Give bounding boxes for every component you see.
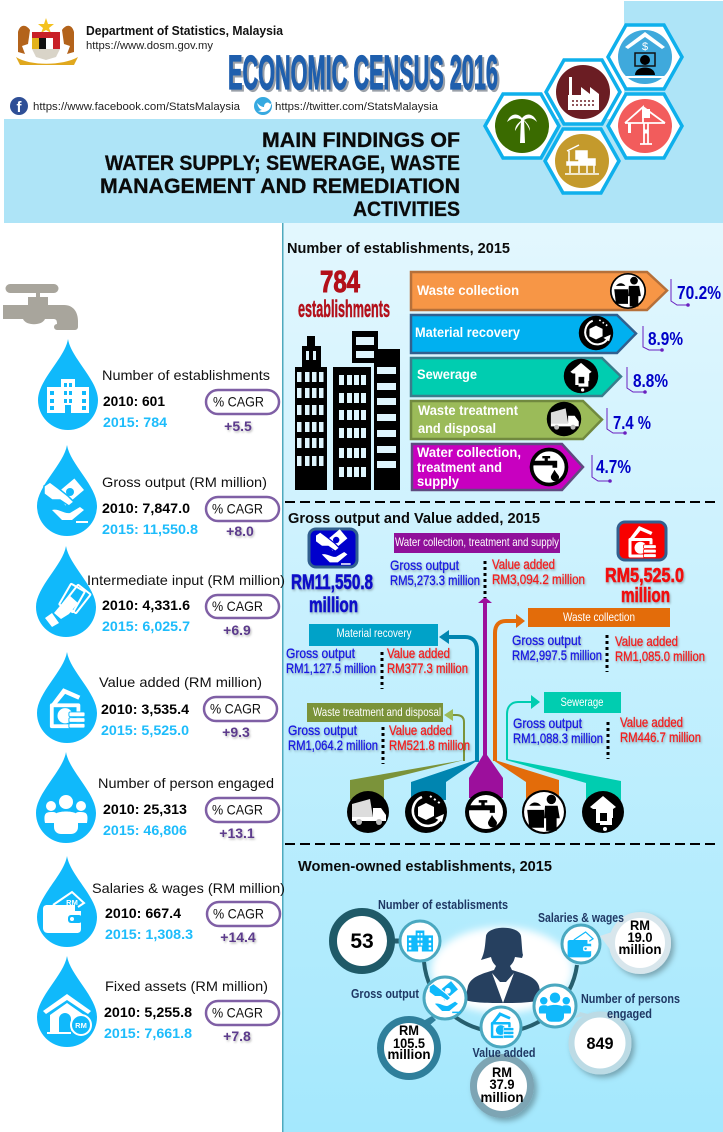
- heading: main findings title: ACTIVITIES: [353, 198, 460, 221]
- stat: gross output: 105.5: [393, 1035, 425, 1051]
- text: value added total: RM5,525.0: [605, 565, 684, 587]
- chart: share arrow waste treatment: 7.4 %: [613, 413, 651, 433]
- icon: drop people: [36, 752, 96, 843]
- chart: share arrow water collection: Water collection,: [417, 444, 521, 460]
- panel: indicator fixed assets: 2010: 5,255.8: [104, 1004, 192, 1020]
- panel: indicator value added: % CAGR: [210, 700, 261, 716]
- panel: waste treatment figures: Waste treatment and disposal: [313, 705, 441, 719]
- panel: indicator persons engaged: [36, 752, 279, 843]
- icon: hexagon services: [608, 25, 682, 89]
- panel: indicator persons engaged: 2010: 25,313: [103, 801, 187, 817]
- stat: persons engaged: [534, 985, 680, 1072]
- heading: gross output and value added: Gross output and Value added, 2015: [288, 511, 540, 527]
- panel: indicator salaries and wages: [37, 856, 285, 947]
- panel: women-owned diagram: [333, 897, 680, 1114]
- stat: value added: million: [480, 1089, 524, 1105]
- icon: city buildings: [295, 331, 400, 490]
- text: value added total: [605, 565, 684, 607]
- chart: share arrow sewerage: [411, 358, 668, 396]
- icon: businesswoman: [465, 928, 542, 1003]
- chart: share arrow sewerage: Sewerage: [417, 366, 477, 382]
- heading: economic census: [228, 47, 500, 102]
- text: gross output total: RM11,550.8: [291, 571, 373, 594]
- text: facebook url: https://www.facebook.com/StatsMalaysia: [33, 101, 241, 113]
- heading: women-owned establishments: Women-owned establishments, 2015: [298, 859, 552, 875]
- panel: indicator gross output: Gross output (RM million): [102, 474, 267, 490]
- stat: gross output: million: [388, 1046, 430, 1062]
- panel: water collection figures: [390, 533, 585, 598]
- icon: drop building: [38, 339, 98, 430]
- panel: waste treatment figures: RM1,064.2 million: [288, 737, 378, 753]
- panel: indicator persons engaged: 2015: 46,806: [103, 822, 187, 838]
- panel: indicator gross output: % CAGR: [212, 500, 263, 516]
- chart: share arrow water collection: [412, 444, 631, 490]
- panel: indicator intermediate input: [36, 546, 285, 638]
- text: gross output total: [291, 571, 373, 617]
- panel: water collection figures: RM3,094.2 million: [492, 571, 585, 587]
- panel: material recovery figures: RM377.3 million: [387, 660, 468, 676]
- stat: value added: 37.9: [490, 1076, 515, 1092]
- icon: water tap: [3, 284, 78, 330]
- heading: main findings title: MANAGEMENT AND REMEDIATION: [100, 175, 460, 198]
- panel: indicator fixed assets: % CAGR: [212, 1004, 263, 1020]
- arrow: to water collection: [469, 597, 503, 798]
- chart: share arrow waste treatment: [411, 401, 651, 439]
- panel: indicator value added: [37, 652, 277, 743]
- icon: coat of arms: [16, 18, 78, 65]
- panel: sewerage figures: RM1,088.3 million: [513, 730, 603, 746]
- white collar: [492, 973, 514, 1003]
- text: gross output total: million: [309, 594, 358, 617]
- chart: share arrow sewerage: 8.8%: [633, 371, 668, 391]
- stat: persons engaged: Number of persons: [581, 991, 680, 1006]
- icon: hexagon mining: [545, 129, 619, 193]
- icon: drop house: [37, 956, 97, 1047]
- stat: salaries and wages: Salaries & wages: [538, 910, 624, 925]
- panel: water collection figures: Gross output: [390, 557, 459, 573]
- panel: sewerage figures: RM446.7 million: [620, 729, 701, 745]
- panel: sewerage figures: Sewerage: [560, 695, 604, 709]
- icon: twitter: [254, 97, 272, 115]
- stat: salaries and wages: [538, 910, 668, 971]
- icon: drop house: RM: [75, 1021, 87, 1030]
- stat: value added: Value added: [472, 1045, 536, 1060]
- icon: drop money stack: [37, 652, 97, 743]
- stat: salaries and wages: million: [618, 941, 662, 957]
- diagram: flows from sectors: [350, 597, 621, 800]
- panel: title band: [4, 119, 723, 223]
- stat: establishments: 53: [350, 930, 374, 953]
- panel: indicator gross output: +8.0: [226, 523, 254, 539]
- icon: hexagon agriculture: [485, 94, 559, 158]
- stat: persons engaged: engaged: [607, 1006, 652, 1021]
- panel: column divider: [282, 223, 284, 1132]
- panel: indicator salaries and wages: Salaries & wages (RM million): [92, 880, 285, 896]
- panel: material recovery figures: Material recovery: [336, 626, 412, 640]
- chart: share arrow waste collection: [411, 272, 721, 310]
- icon: gross output badge: [309, 529, 357, 567]
- panel: indicator persons engaged: +13.1: [219, 825, 255, 841]
- panel: indicator intermediate input: % CAGR: [212, 598, 263, 614]
- arrow: to waste collection: [493, 614, 559, 800]
- icon: drop money hand: [37, 445, 97, 536]
- panel: waste collection figures: RM2,997.5 million: [512, 647, 602, 663]
- panel: waste collection figures: Gross output: [512, 632, 581, 648]
- arrow: to material recovery: [411, 630, 478, 800]
- icon: drop wallet: [37, 856, 97, 947]
- panel: material recovery figures: Value added: [387, 645, 450, 661]
- panel: right column background: [283, 223, 723, 1132]
- heading: main findings title: WATER SUPPLY; SEWERAGE, WASTE: [105, 152, 460, 175]
- stat: value added: [472, 1007, 536, 1114]
- stat: gross output: [351, 977, 466, 1076]
- panel: sewerage figures: [513, 692, 701, 759]
- panel: indicator intermediate input: 2010: 4,331.6: [102, 597, 190, 613]
- panel: water collection figures: Value added: [492, 556, 555, 572]
- panel: indicator persons engaged: Number of person engaged: [98, 775, 274, 791]
- panel: water collection figures: Water collection, treatment and supply: [395, 535, 559, 549]
- chart: share arrow material recovery: Material recovery: [415, 324, 520, 340]
- icon: hexagon construction: [608, 94, 682, 158]
- chart: share arrow water collection: 4.7%: [596, 457, 631, 477]
- text: 784 establishments: 784: [320, 264, 361, 299]
- panel: indicator value added: 2010: 3,535.4: [101, 701, 189, 717]
- chart: share arrow material recovery: [411, 315, 683, 353]
- panel: waste treatment figures: [288, 703, 470, 764]
- panel: indicator fixed assets: [37, 956, 279, 1047]
- panel: indicator gross output: 2015: 11,550.8: [102, 521, 198, 537]
- panel: water collection figures: RM5,273.3 million: [390, 572, 480, 588]
- stat: value added: RM: [492, 1064, 512, 1080]
- icon: drop wallet: RM: [66, 898, 78, 907]
- stat: gross output: RM: [399, 1022, 419, 1038]
- panel: indicator intermediate input: 2015: 6,025.7: [102, 618, 190, 634]
- stat: salaries and wages: 19.0: [628, 929, 653, 945]
- stat: establishments: Number of establisments: [378, 897, 508, 912]
- panel: material recovery figures: RM1,127.5 million: [286, 660, 376, 676]
- panel: indicator value added: Value added (RM million): [99, 674, 262, 690]
- panel: indicator value added: 2015: 5,525.0: [101, 722, 189, 738]
- chart: share arrow waste treatment: Waste treatment: [418, 402, 518, 418]
- text: twitter url: https://twitter.com/StatsMalaysia: [275, 101, 439, 113]
- arc connector: [424, 962, 577, 1032]
- chart: share arrow material recovery: 8.9%: [648, 329, 683, 349]
- chart: share arrow water collection: supply: [417, 473, 459, 489]
- panel: indicator salaries and wages: 2015: 1,308.3: [105, 926, 193, 942]
- panel: indicator fixed assets: +7.8: [223, 1028, 251, 1044]
- panel: waste collection figures: Value added: [615, 633, 678, 649]
- icon: facebook: [10, 97, 28, 116]
- panel: indicator value added: +9.3: [222, 724, 250, 740]
- icon: sector circles: [347, 790, 624, 834]
- panel: indicator persons engaged: % CAGR: [212, 802, 263, 818]
- arrow: to waste treatment: [350, 709, 464, 800]
- arrow: to sewerage: [506, 695, 621, 800]
- chart: share arrow waste collection: Waste collection: [417, 282, 519, 298]
- panel: indicator number of establishments: Number of establishments: [102, 367, 270, 383]
- panel: waste treatment figures: Value added: [389, 722, 452, 738]
- chart: share arrow water collection: treatment and: [417, 459, 502, 475]
- text: value added total: million: [621, 585, 670, 607]
- stat: salaries and wages: RM: [630, 917, 650, 933]
- panel: waste collection figures: [512, 608, 705, 672]
- panel: indicator fixed assets: 2015: 7,661.8: [104, 1025, 192, 1041]
- panel: waste treatment figures: Gross output: [288, 722, 357, 738]
- panel: top-right corner block: [624, 1, 723, 120]
- panel: waste treatment figures: RM521.8 million: [389, 737, 470, 753]
- panel: indicator salaries and wages: 2010: 667.4: [105, 905, 181, 921]
- heading: number of establishments: Number of establishments, 2015: [287, 241, 510, 257]
- icon: drop card hand: [36, 546, 96, 637]
- panel: indicator number of establishments: % CAGR: [213, 394, 264, 410]
- panel: indicator salaries and wages: % CAGR: [213, 906, 264, 922]
- panel: indicator gross output: 2010: 7,847.0: [102, 500, 190, 516]
- text: department website: https://www.dosm.gov.my: [86, 40, 214, 52]
- panel: indicator salaries and wages: +14.4: [220, 929, 256, 945]
- panel: material recovery figures: [286, 624, 468, 689]
- panel: sewerage figures: Value added: [620, 714, 683, 730]
- stat: establishments: [333, 897, 508, 970]
- panel: waste collection figures: Waste collection: [563, 610, 635, 624]
- text: 784 establishments: [298, 264, 390, 323]
- icon: value added badge: [618, 522, 666, 560]
- panel: indicator number of establishments: [38, 339, 279, 434]
- heading: main findings title: MAIN FINDINGS OF: [262, 129, 460, 152]
- panel: indicator number of establishments: 2015: 784: [103, 414, 167, 430]
- stat: persons engaged: 849: [586, 1034, 614, 1053]
- icon: hexagon manufacturing: [546, 60, 620, 124]
- text: department name: Department of Statistics, Malaysia: [86, 24, 284, 38]
- panel: indicator number of establishments: +5.5: [224, 418, 252, 434]
- panel: indicator number of establishments: 2010: 601: [103, 393, 165, 409]
- stat: gross output: Gross output: [351, 986, 420, 1001]
- panel: indicator intermediate input: Intermediate input (RM million): [87, 572, 285, 588]
- panel: sewerage figures: Gross output: [513, 715, 582, 731]
- heading: main findings title: [100, 129, 460, 221]
- panel: material recovery figures: Gross output: [286, 645, 355, 661]
- icon: facebook: f: [16, 99, 22, 116]
- panel: indicator fixed assets: Fixed assets (RM million): [105, 978, 268, 994]
- chart: share arrow waste treatment: and disposal: [418, 420, 496, 436]
- panel: indicator gross output: [37, 445, 279, 539]
- icon: hexagon services: $: [642, 41, 648, 53]
- panel: indicator intermediate input: +6.9: [223, 622, 251, 638]
- text: 784 establishments: establishments: [298, 296, 390, 323]
